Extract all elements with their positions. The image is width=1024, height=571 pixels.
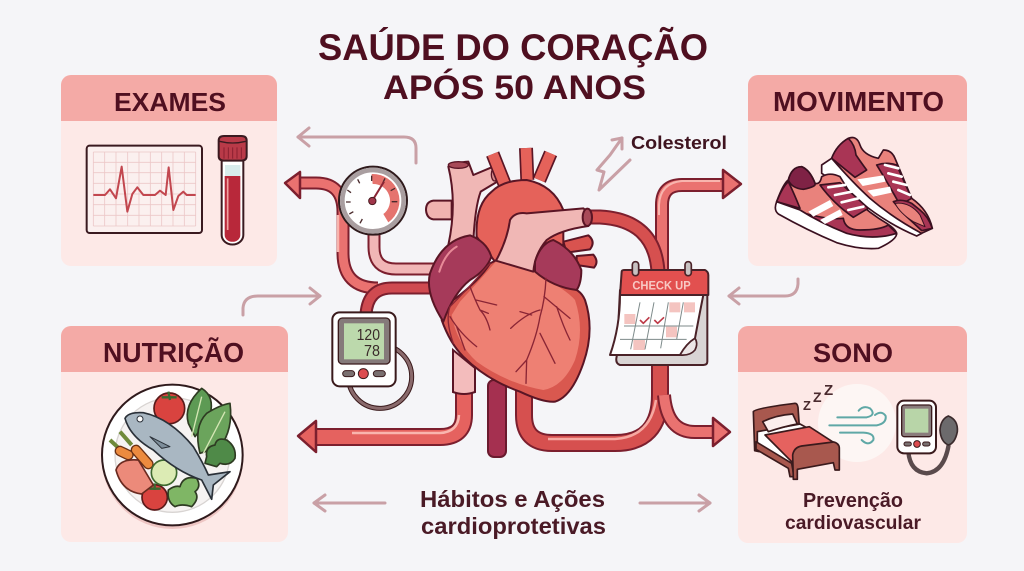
pipe: aorta to calendar: [585, 217, 658, 272]
arrow: movimento thin: [729, 279, 798, 304]
heart: aorta branches: [493, 148, 551, 185]
pipe: pink stub below heart: [453, 350, 475, 394]
panel: exames: [61, 75, 277, 266]
icon: zzz: Z: [813, 389, 822, 405]
text: prevenção cardiovascular: cardiovascular: [785, 512, 921, 534]
heading: exames: EXAMES: [114, 87, 226, 117]
heart: left atrium: [429, 235, 491, 322]
icon: zzz: Z: [803, 398, 811, 413]
icon: blood test tube: [219, 136, 247, 244]
text: hábitos e ações cardioprotetivas: Hábitos e Ações: [420, 486, 605, 512]
heart: side stubs: [426, 201, 597, 268]
icon: zzz: Z: [824, 382, 833, 399]
panel: sono: [738, 326, 967, 543]
title: APÓS 50 ANOS: [383, 69, 646, 107]
icon: blood pressure monitor: 120: [357, 327, 380, 344]
text: hábitos e ações cardioprotetivas: [420, 486, 606, 539]
pipe: bottom-left arrow: [298, 390, 464, 452]
icon: pressure gauge: [339, 167, 407, 235]
icon: blood pressure monitor: [332, 312, 412, 408]
pipe: bottom-right arrow: [664, 395, 730, 446]
icon: plate of healthy food: [102, 385, 243, 529]
arrow: bottom-left thin: [314, 495, 385, 511]
cucumber: [151, 460, 177, 485]
back shoe: [822, 137, 932, 236]
heading: movimento: MOVIMENTO: [773, 86, 944, 117]
arrow: top-left thin: [298, 128, 416, 163]
title: [318, 26, 708, 107]
text: hábitos e ações cardioprotetivas: cardioprotetivas: [421, 513, 606, 539]
panel: movimento: [748, 75, 967, 266]
icon: blood pressure monitor: 78: [364, 343, 380, 360]
fish: [125, 413, 230, 499]
icon: zzz: [803, 382, 833, 413]
panel: nutrição: [61, 326, 288, 542]
tomatoes: [142, 392, 185, 510]
pipe: center dark vessel: [488, 380, 506, 457]
pipe: light pink gauge pipe: [374, 232, 436, 269]
heart: superior vena cava: [448, 162, 498, 245]
icon: ecg monitor: [87, 146, 202, 233]
icon: check-up calendar: [610, 262, 708, 365]
icon: bed: [753, 403, 839, 479]
heart: ventricles: [442, 260, 590, 402]
heart: right atrium: [535, 240, 581, 290]
heading: nutrição: NUTRIÇÃO: [103, 337, 244, 368]
icon: blood pressure device: [897, 401, 957, 473]
label: colesterol: Colesterol: [631, 133, 727, 153]
arrow: bottom-right thin: [640, 495, 710, 511]
arrow: cholesterol zigzag: [597, 138, 630, 190]
icon: sneakers: [775, 137, 932, 249]
heart: coronary vessels: [448, 263, 570, 383]
carrots: [120, 450, 148, 464]
heart: aortic arch: [477, 180, 563, 262]
icon: heart: [426, 148, 597, 402]
pipe: monitor to heart: [366, 288, 436, 314]
carrot greens: [110, 432, 132, 449]
leafy greens: [187, 388, 235, 467]
front shoe: [775, 167, 897, 249]
icon: air circle behind: [818, 384, 896, 462]
arrow: nutrition thin: [243, 288, 320, 315]
salmon slice: [116, 460, 153, 494]
icon: check-up calendar: CHECK UP: [632, 280, 691, 293]
heart: pulmonary artery: [496, 208, 590, 272]
heading: sono: SONO: [813, 338, 893, 368]
title: SAÚDE DO CORAÇÃO: [318, 26, 708, 68]
pipe: top-right arrow: [659, 170, 741, 275]
icon: breathing air: [829, 407, 886, 443]
pipe: bottom-right u-shaped vessel: [524, 360, 660, 443]
lettuce: [168, 478, 199, 507]
text: prevenção cardiovascular: [785, 490, 921, 534]
pipe: top-left arrow pipe: [285, 172, 378, 288]
text: prevenção cardiovascular: Prevenção: [803, 490, 903, 512]
